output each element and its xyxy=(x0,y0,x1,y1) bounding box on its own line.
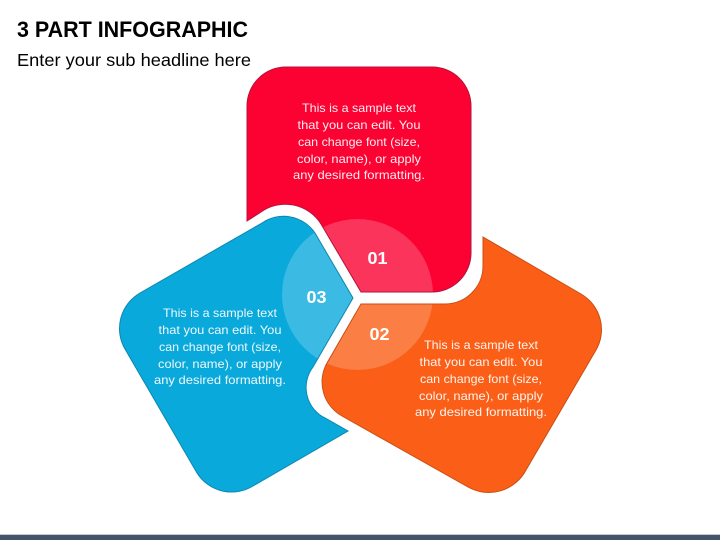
text: 02 body: This is a sample text xyxy=(424,339,539,352)
text: 03 body: that you can edit. You xyxy=(158,324,282,337)
text: 02 body: any desired formatting. xyxy=(415,406,547,419)
text: 03 body xyxy=(154,307,286,387)
text: 03 body: color, name), or apply xyxy=(158,358,282,371)
title: 3 PART INFOGRAPHIC xyxy=(17,17,248,42)
text: 01 body xyxy=(293,102,425,182)
text: 03 body: can change font (size, xyxy=(159,341,281,354)
text: 01 body: that you can edit. You xyxy=(298,119,420,132)
text: 02 body: that you can edit. You xyxy=(420,356,542,369)
text: 02 body: color, name), or apply xyxy=(419,390,543,403)
panel: 02 orange xyxy=(322,236,602,493)
number 03: 03 xyxy=(306,287,327,307)
panel: 01 red xyxy=(246,66,472,292)
number 02: 02 xyxy=(370,324,390,344)
footer bar xyxy=(0,535,720,540)
panel: 03 blue xyxy=(119,216,354,492)
text: 02 body: can change font (size, xyxy=(420,373,542,386)
text: 01 body: can change font (size, xyxy=(298,136,420,149)
text: 02 body xyxy=(415,339,547,419)
subtitle: Enter your sub headline here xyxy=(17,50,251,70)
text: 01 body: any desired formatting. xyxy=(293,169,425,182)
text: 01 body: This is a sample text xyxy=(302,102,417,115)
text: 03 body: any desired formatting. xyxy=(154,374,286,387)
text: 01 body: color, name), or apply xyxy=(297,153,421,166)
number 01: 01 xyxy=(368,248,388,268)
text: 03 body: This is a sample text xyxy=(163,307,278,320)
